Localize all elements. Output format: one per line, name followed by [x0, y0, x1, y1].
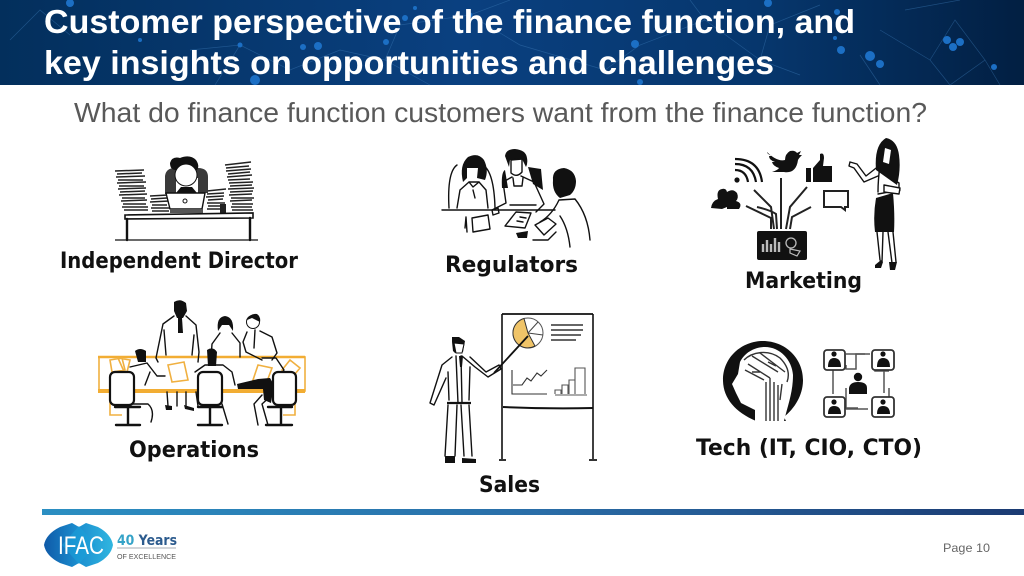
panel: regulators — [442, 149, 590, 278]
title: key insights on opportunities and challenges — [44, 44, 774, 81]
icon: thumbs up — [806, 154, 832, 182]
icon: connected people network — [824, 350, 894, 417]
figure standing — [174, 300, 187, 318]
header banner — [0, 0, 1024, 85]
icon: speech bubble — [824, 191, 848, 210]
IFAC logo — [44, 523, 177, 567]
label: Operations: Operations — [129, 438, 259, 463]
seated left — [135, 349, 146, 362]
icon: regulators meeting — [442, 149, 590, 247]
whiteboard — [499, 314, 597, 460]
man — [452, 337, 465, 353]
label: Regulators: Regulators — [445, 253, 578, 278]
icon: bird — [767, 151, 802, 172]
logo text: of excellence: OF EXCELLENCE — [117, 552, 176, 561]
pie chart — [513, 318, 543, 348]
logo text: 40 Years: 40 Years — [117, 533, 177, 549]
icon: people — [711, 189, 740, 209]
footer bar — [42, 509, 1024, 515]
icon: wifi feed — [734, 159, 762, 183]
label: Tech (IT, CIO, CTO): Tech (IT, CIO, CTO) — [696, 436, 922, 461]
page number: Page 10 — [943, 541, 990, 555]
title: Customer perspective of the finance function, and — [44, 3, 855, 40]
panel: marketing — [711, 138, 900, 294]
icon: circuit brain head — [723, 341, 803, 421]
label: Sales: Sales — [479, 473, 540, 498]
title — [44, 3, 855, 81]
line chart — [512, 370, 547, 394]
figures behind — [218, 316, 233, 331]
seated centre — [207, 348, 217, 366]
seated right — [254, 358, 284, 425]
panel: independent director — [60, 156, 298, 274]
legend lines — [551, 325, 583, 340]
bar chart — [555, 368, 587, 395]
panel: operations — [98, 300, 305, 463]
icon: overworked director at desk — [115, 156, 258, 240]
logo emblem: IFAC — [58, 532, 104, 560]
icon: presenter woman — [849, 138, 900, 270]
panel: sales — [430, 314, 597, 498]
label: Independent Director: Independent Director — [60, 249, 298, 274]
panel: tech — [696, 341, 922, 461]
icon: team around orange table — [98, 300, 305, 425]
label: Marketing: Marketing — [745, 269, 862, 294]
icon: presenter with whiteboard — [430, 314, 597, 463]
icon: social media hub — [711, 151, 848, 260]
subtitle: What do finance function customers want from the finance function? — [74, 97, 927, 128]
